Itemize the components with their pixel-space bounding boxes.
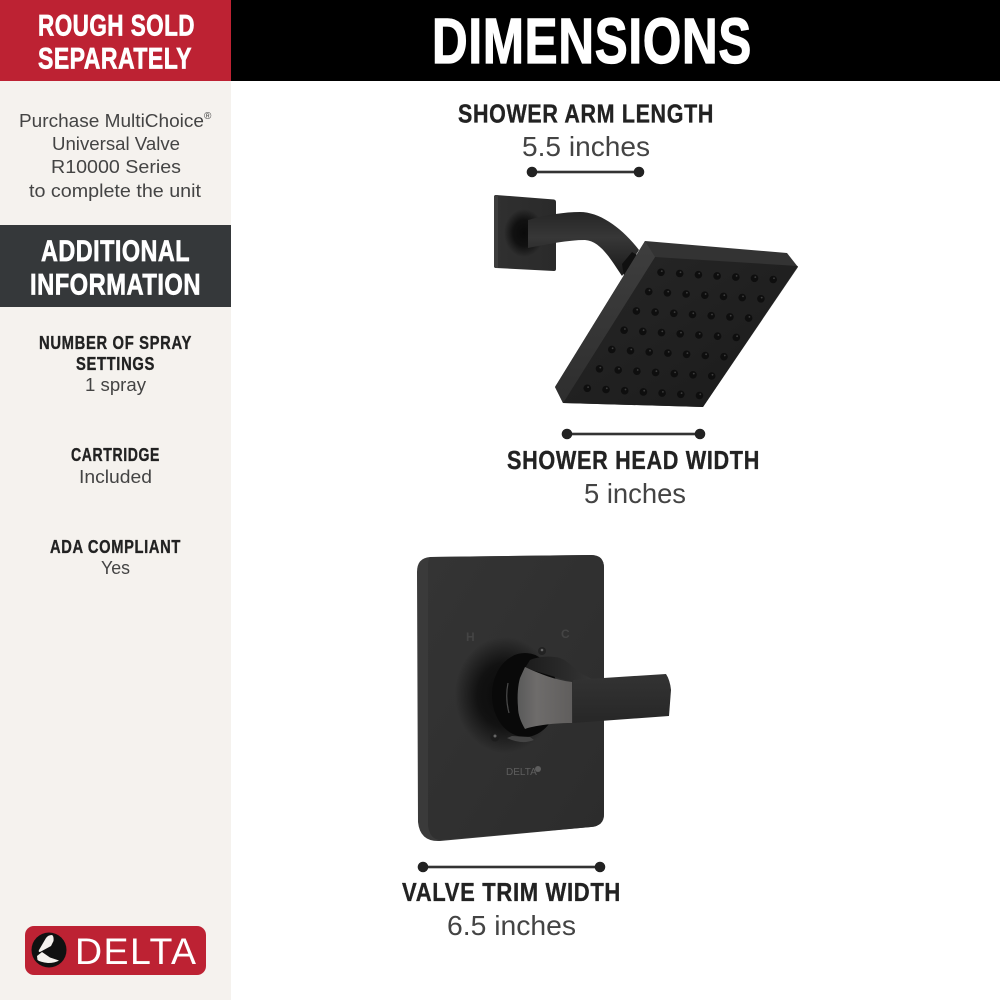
handle shadow [455,637,555,753]
title: dimensions: DIMENSIONS [432,5,752,77]
illustration: valve trim [417,555,671,841]
spec: cartridge [71,445,160,487]
label: shower head width [507,445,760,509]
panel: sidebar [0,0,231,1000]
logo: delta [25,926,206,975]
plate markings: DELTA [506,767,537,778]
label: valve trim width [402,877,621,941]
shower head [555,241,798,407]
plate markings: H [466,630,475,644]
valve knob [518,657,592,729]
dimension line: shower head [562,429,705,439]
text: purchase note: Purchase MultiChoice [19,111,204,131]
plate markings [466,627,570,778]
text: purchase note: Universal Valve [52,134,180,154]
valve hub [492,653,558,737]
spec: number of spray settings: SETTINGS [76,354,155,374]
text: purchase note [19,111,212,201]
label: shower arm length: 5.5 inches [522,131,650,162]
label: shower head width: SHOWER HEAD WIDTH [507,445,760,475]
banner: additional information: ADDITIONAL [41,235,190,268]
spec: ada compliant [50,537,181,578]
label: valve trim width: 6.5 inches [447,910,576,941]
text: purchase note: R10000 Series [51,157,181,177]
wall flange [494,195,556,271]
text: purchase note: to complete the unit [29,181,201,201]
spec: number of spray settings: NUMBER OF SPRAY [39,333,192,353]
dimension line: shower arm [527,167,644,177]
dimension line: valve trim [418,862,605,872]
banner: additional information [0,225,231,307]
label: shower head width: 5 inches [584,478,686,509]
lever handle [573,674,671,723]
spec: number of spray settings [39,333,192,395]
label: shower arm length [458,98,714,162]
title: dimensions [231,0,1000,81]
banner: additional information: INFORMATION [30,268,201,302]
trim plate [417,555,604,841]
spec: ada compliant: ADA COMPLIANT [50,537,181,557]
label: valve trim width: VALVE TRIM WIDTH [402,877,621,907]
banner: rough sold separately: SEPARATELY [38,42,192,76]
banner: rough sold separately [0,0,231,81]
banner: rough sold separately: ROUGH SOLD [38,10,195,42]
logo: delta: DELTA [75,930,196,972]
illustration: shower head and arm [494,195,798,407]
spec: ada compliant: Yes [101,558,130,578]
text: purchase note: ® [204,111,212,122]
spec: cartridge: CARTRIDGE [71,445,160,465]
spec: number of spray settings: 1 spray [85,375,146,395]
label: shower arm length: SHOWER ARM LENGTH [458,98,714,128]
plate markings: C [561,627,570,641]
spec: cartridge: Included [79,467,152,487]
shower arm [528,212,639,276]
